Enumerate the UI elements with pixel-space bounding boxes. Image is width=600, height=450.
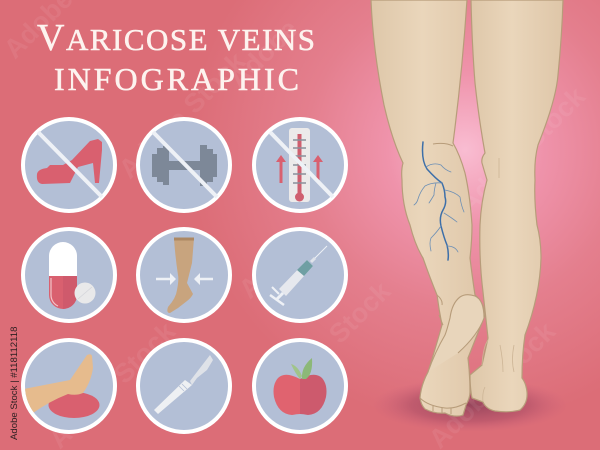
right leg (470, 0, 563, 412)
watermarks: Adobe Stock (113, 46, 252, 184)
icon: apple diet (254, 340, 346, 432)
floor shadow (372, 378, 568, 432)
title line two: INFOGRAPHIC (54, 61, 299, 97)
icon: no high heels (23, 119, 115, 211)
icon: leg elevation (20, 340, 115, 432)
left foot sole (428, 295, 484, 372)
icon: compression stocking (138, 229, 230, 321)
icon: scalpel surgery (138, 340, 230, 432)
icon: no weightlifting (138, 119, 230, 211)
stock credit: Adobe Stock | #118112118 (9, 327, 20, 440)
left foot toes and creases (420, 143, 466, 414)
watermarks: Adobe (223, 14, 304, 94)
right leg creases (482, 158, 514, 402)
watermarks: Stock (323, 275, 397, 349)
watermarks: Adobe Stock (453, 81, 592, 219)
varicose veins (414, 142, 464, 260)
left leg (371, 0, 485, 416)
watermarks: Adobe (233, 224, 314, 304)
title: VARICOSE VEINS (37, 17, 315, 59)
icon: medication capsule (23, 229, 115, 321)
icon: no heat (254, 119, 346, 211)
icon: syringe (254, 229, 346, 321)
